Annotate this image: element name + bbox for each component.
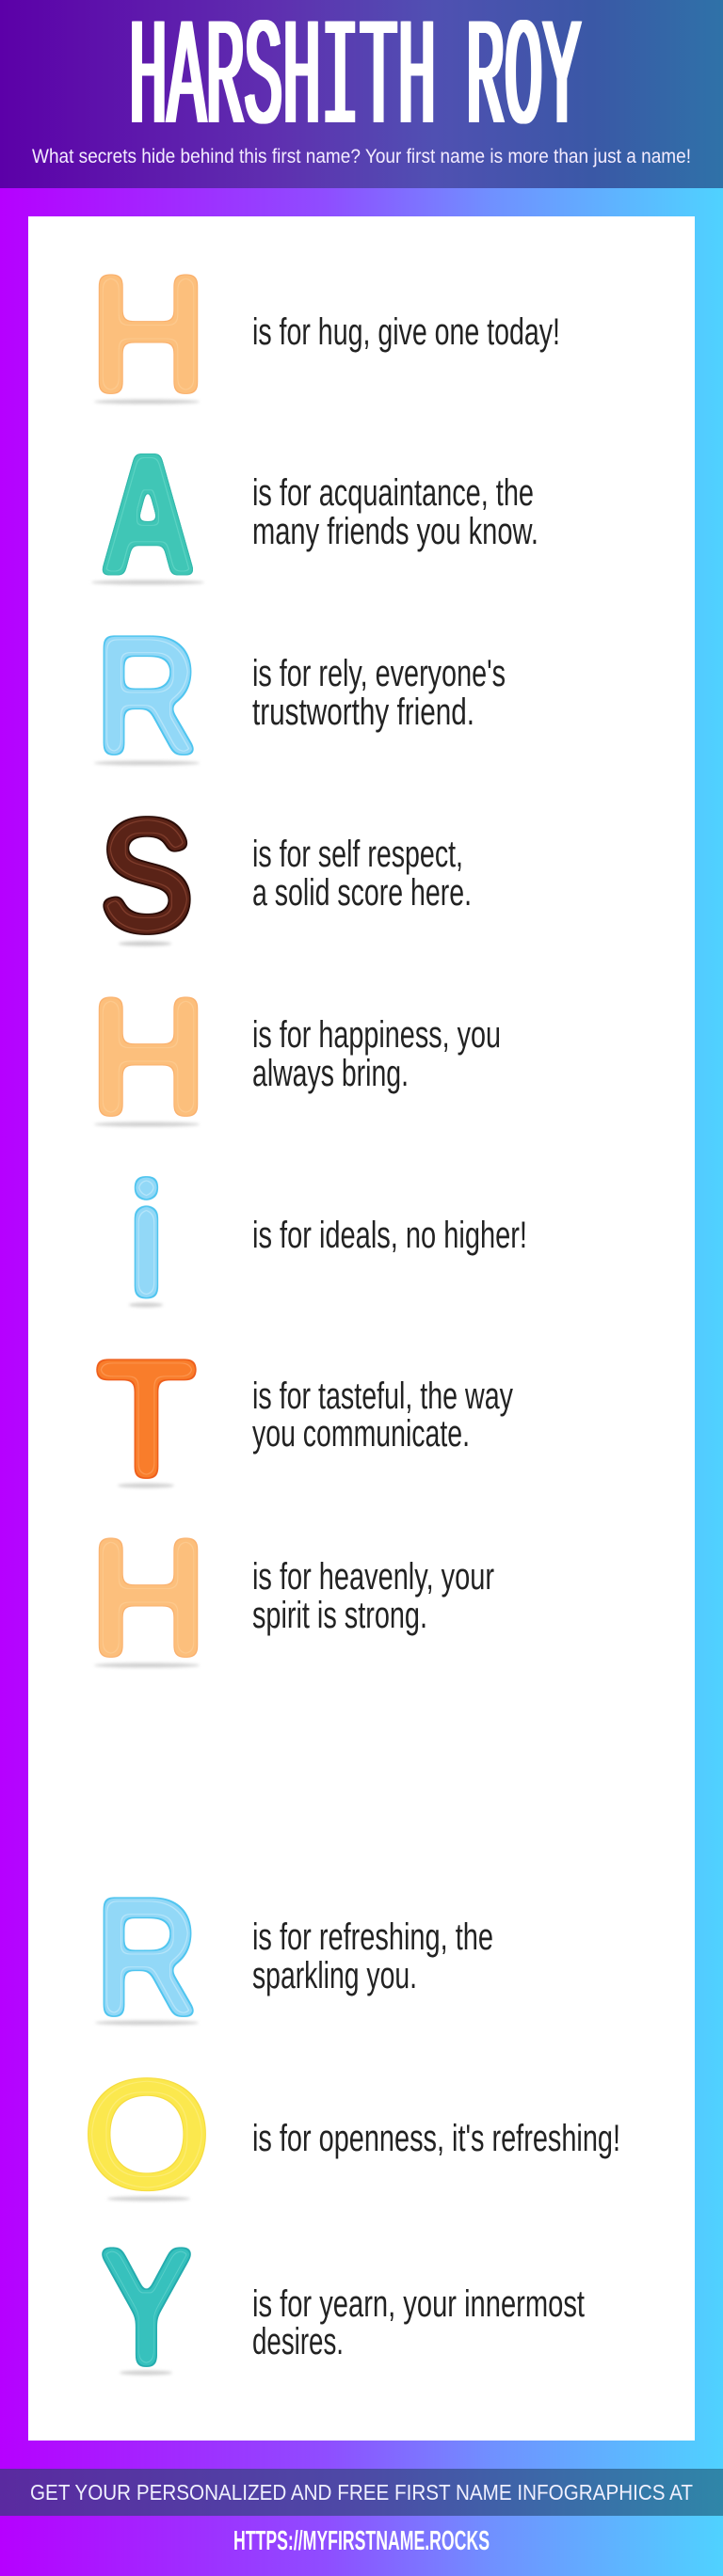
text: tasteful: you communicate.	[252, 1413, 470, 1455]
text: happiness: always bring.	[252, 1053, 409, 1094]
text: rely: is for rely, everyone's	[252, 653, 506, 694]
text: heavenly: is for heavenly, your	[252, 1556, 494, 1598]
text: heavenly	[252, 1556, 494, 1636]
text: self respect	[252, 834, 472, 914]
text: happiness: is for happiness, you	[252, 1014, 501, 1056]
text: acquaintance: is for acquaintance, the	[252, 472, 534, 514]
row: A for acquaintance	[91, 421, 538, 608]
icon: letter H: H	[90, 245, 206, 424]
content panel	[28, 216, 695, 2441]
text: self respect: is for self respect,	[252, 834, 463, 875]
text: ideals: is for ideals, no higher!	[252, 1215, 527, 1256]
row: O for openness	[84, 2051, 620, 2219]
text: yearn: desires.	[252, 2321, 344, 2362]
footer band	[0, 2469, 723, 2516]
text: tasteful	[252, 1375, 513, 1455]
icon: letter H: H	[90, 1508, 206, 1688]
row: S for self respect	[100, 790, 472, 962]
icon: letter T: T	[97, 1329, 196, 1509]
text: yearn: is for yearn, your innermost	[252, 2283, 585, 2325]
row: R for rely	[94, 606, 506, 786]
icon: letter S: S	[100, 790, 193, 962]
row: I for ideals	[129, 1153, 527, 1327]
text: hug: is for hug, give one today!	[252, 311, 560, 353]
icon: letter R: R	[96, 1868, 198, 2047]
row: H for hug	[90, 245, 560, 424]
icon: letter A: A	[101, 421, 195, 608]
text: refreshing: sparkling you.	[252, 1955, 417, 1996]
text: self respect: a solid score here.	[252, 872, 472, 914]
text: rely	[252, 653, 506, 733]
text: happiness	[252, 1014, 501, 1094]
row: T for tasteful	[97, 1329, 513, 1509]
row: R for refreshing	[95, 1868, 493, 2047]
icon: letter Y: Y	[102, 2218, 191, 2395]
text: refreshing: is for refreshing, the	[252, 1916, 493, 1958]
icon: letter H: H	[90, 967, 206, 1147]
header band	[0, 0, 723, 188]
text: tasteful: is for tasteful, the way	[252, 1375, 513, 1417]
row: H for happiness	[90, 967, 501, 1147]
icon: letter I: i	[129, 1153, 164, 1327]
text: heavenly: spirit is strong.	[252, 1595, 427, 1636]
text: rely: trustworthy friend.	[252, 692, 474, 733]
row: H for heavenly	[90, 1508, 494, 1688]
text: yearn	[252, 2283, 585, 2362]
row: Y for yearn	[102, 2218, 585, 2395]
text: acquaintance: many friends you know.	[252, 511, 538, 552]
icon: letter O: O	[84, 2051, 210, 2219]
footer url: HTTPS://MYFIRSTNAME.ROCKS	[233, 2526, 490, 2556]
text: acquaintance	[252, 472, 538, 552]
icon: letter R: R	[96, 606, 198, 786]
text: refreshing	[252, 1916, 493, 1996]
